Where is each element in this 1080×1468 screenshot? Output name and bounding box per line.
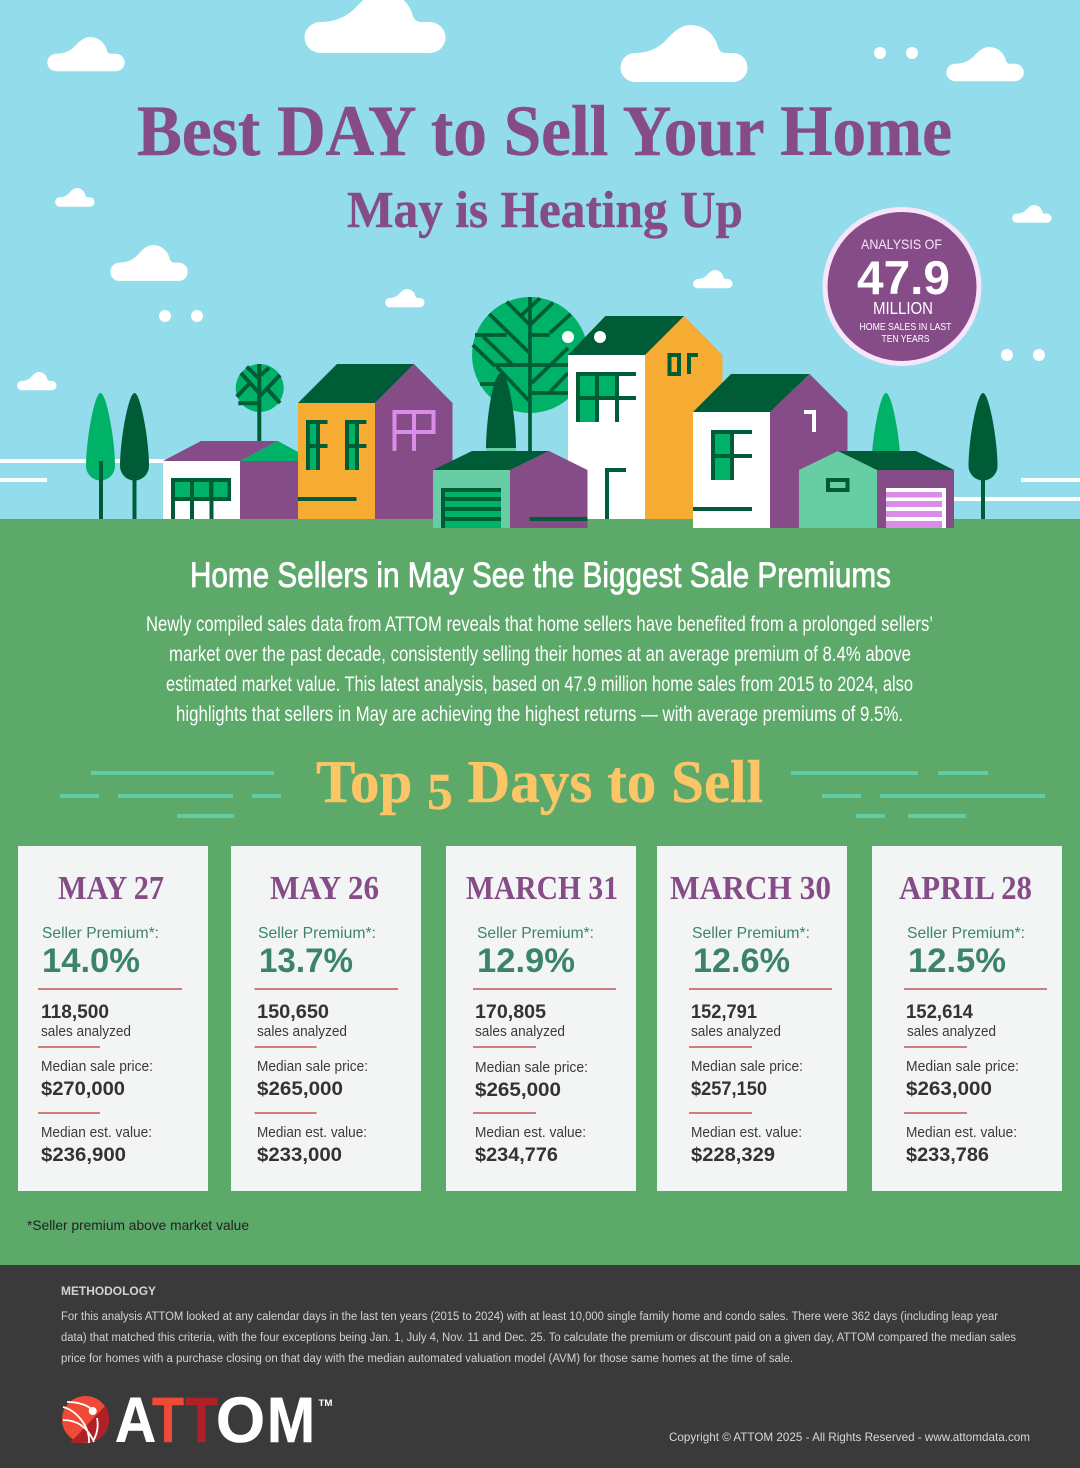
logo wordmark: A (115, 1384, 156, 1456)
house: garage green and purple (433, 451, 588, 528)
card: May 26: 13.7% (259, 942, 353, 980)
card: March 31: Median sale price: (475, 1060, 588, 1076)
badge: analysis of 47.9 million: 47.9 (857, 251, 950, 304)
methodology (61, 1286, 1016, 1365)
ground and content background (0, 519, 1080, 1265)
card: April 28: 12.5% (908, 942, 1006, 980)
card: April 28: Seller Premium*: (907, 925, 1025, 942)
card: April 28: $233,786 (906, 1144, 989, 1166)
title: Best DAY to Sell Your Home (137, 91, 952, 171)
tree: large round (472, 297, 588, 451)
footer panel (0, 1265, 1080, 1468)
footnote: *Seller premium above market value (27, 1217, 249, 1233)
card: March 31 (446, 846, 636, 1191)
tree: middle dark (486, 373, 516, 452)
card: May 26: 150,650 (257, 1001, 329, 1023)
card: May 26: $265,000 (257, 1078, 343, 1100)
logo wordmark: O (216, 1384, 265, 1456)
card: May 27: $270,000 (41, 1078, 125, 1100)
card: May 26: MAY 26 (270, 870, 379, 907)
card: April 28: Median sale price: (906, 1059, 1019, 1075)
card: May 27: 14.0% (42, 942, 140, 980)
badge: analysis of 47.9 million: MILLION (873, 298, 933, 318)
card: March 31: 170,805 (475, 1001, 546, 1023)
card: March 31: $265,000 (475, 1079, 561, 1101)
teal dash lines (60, 771, 1045, 818)
dots over roof (562, 331, 606, 343)
heading: top 5 days: Top (316, 749, 414, 815)
card: April 28: $263,000 (906, 1078, 992, 1100)
card: March 31: sales analyzed (475, 1024, 565, 1040)
copyright: Copyright © ATTOM 2025 - All Rights Reserved - www.attomdata.com (669, 1430, 1030, 1444)
neighbourhood illustration (86, 297, 998, 528)
sky background (0, 0, 1080, 520)
methodology: data) that matched this criteria, with the four exceptions being Jan. 1, July 4, Nov. 11 and Dec. 25. To calculate the premium or discount paid on a given day, ATTOM compared the median sales (61, 1332, 1016, 1344)
logo wordmark: T (185, 1384, 218, 1456)
methodology: price for homes with a purchase closing on that day with the median automated valuation model (AVM) for those same homes at the time of sale. (61, 1353, 793, 1365)
card: March 30: sales analyzed (691, 1024, 781, 1040)
clouds and sky dots (17, 0, 1052, 390)
badge: analysis of 47.9 million (825, 210, 979, 364)
card: April 28: sales analyzed (907, 1024, 996, 1040)
card: April 28 (872, 846, 1062, 1191)
logo wordmark: M (267, 1384, 315, 1456)
methodology: METHODOLOGY (61, 1286, 156, 1298)
logo wordmark: T (152, 1384, 184, 1456)
card: May 26: sales analyzed (257, 1024, 347, 1040)
card: May 27: MAY 27 (58, 870, 164, 907)
trademark: TM (318, 1398, 332, 1408)
card: May 26: Median sale price: (257, 1059, 368, 1075)
ATTOM logo (62, 1384, 332, 1456)
card: March 30: 12.6% (693, 942, 790, 980)
badge: analysis of 47.9 million: TEN YEARS (882, 333, 930, 345)
house: low white and purple (163, 441, 298, 519)
tree: small round (236, 364, 284, 441)
tree: right dark green (968, 393, 998, 519)
horizon lines (0, 459, 1080, 501)
methodology: For this analysis ATTOM looked at any calendar days in the last ten years (2015 to 2024) with at least 10,000 single family home and condo sales. There were 362 days (including leap year (61, 1311, 998, 1323)
card: March 30: MARCH 30 (670, 870, 831, 907)
card: May 26: Median est. value: (257, 1125, 367, 1141)
card: May 27: 118,500 (41, 1001, 109, 1023)
subtitle: May is Heating Up (347, 182, 743, 239)
card: March 31: Seller Premium*: (477, 925, 594, 942)
card: April 28: Median est. value: (906, 1125, 1017, 1141)
card: March 30: Seller Premium*: (692, 925, 810, 942)
house: white and orange tall (568, 316, 722, 519)
card: March 31: $234,776 (475, 1144, 558, 1166)
card: March 31: MARCH 31 (466, 870, 618, 907)
card: May 27: $236,900 (41, 1144, 126, 1166)
badge: analysis of 47.9 million: HOME SALES IN LAST (860, 321, 952, 333)
intro paragraph: market over the past decade, consistently selling their homes at an average premium of 8.4% above (169, 643, 911, 666)
house: small green and purple (799, 451, 954, 528)
card: May 27: Seller Premium*: (42, 925, 159, 942)
card: March 30: Median sale price: (691, 1059, 803, 1075)
logo mark (62, 1396, 109, 1443)
tree: right light green (872, 393, 900, 480)
card: March 30: Median est. value: (691, 1125, 802, 1141)
heading: top 5 days: 5 (427, 764, 453, 821)
heading: top 5 days: Days to Sell (453, 749, 763, 815)
card: May 27: sales analyzed (41, 1024, 131, 1040)
card: May 26: Seller Premium*: (258, 925, 376, 942)
house: white and purple front (693, 374, 848, 528)
card: April 28: 152,614 (906, 1001, 973, 1023)
intro paragraph (146, 613, 933, 726)
card: March 31: 12.9% (477, 942, 575, 980)
card: March 31: Median est. value: (475, 1125, 586, 1141)
card: May 26 (231, 846, 421, 1191)
card: April 28: APRIL 28 (899, 870, 1032, 907)
card: March 30 (657, 846, 847, 1191)
tree: left dark green (120, 393, 149, 519)
house: orange and purple tall (298, 364, 452, 519)
card: May 27 (18, 846, 208, 1191)
section heading: Home Sellers in May See the Biggest Sale Premiums (190, 556, 891, 595)
badge: analysis of 47.9 million: ANALYSIS OF (861, 236, 942, 252)
card: March 30: 152,791 (691, 1001, 757, 1023)
intro paragraph: highlights that sellers in May are achieving the highest returns — with average premiums of 9.5%. (176, 703, 903, 726)
card: March 30: $228,329 (691, 1144, 775, 1166)
card: May 26: $233,000 (257, 1144, 342, 1166)
card: May 27: Median est. value: (41, 1125, 152, 1141)
tree: left light green (86, 393, 115, 519)
card: March 30: $257,150 (691, 1078, 767, 1100)
card: May 27: Median sale price: (41, 1059, 153, 1075)
